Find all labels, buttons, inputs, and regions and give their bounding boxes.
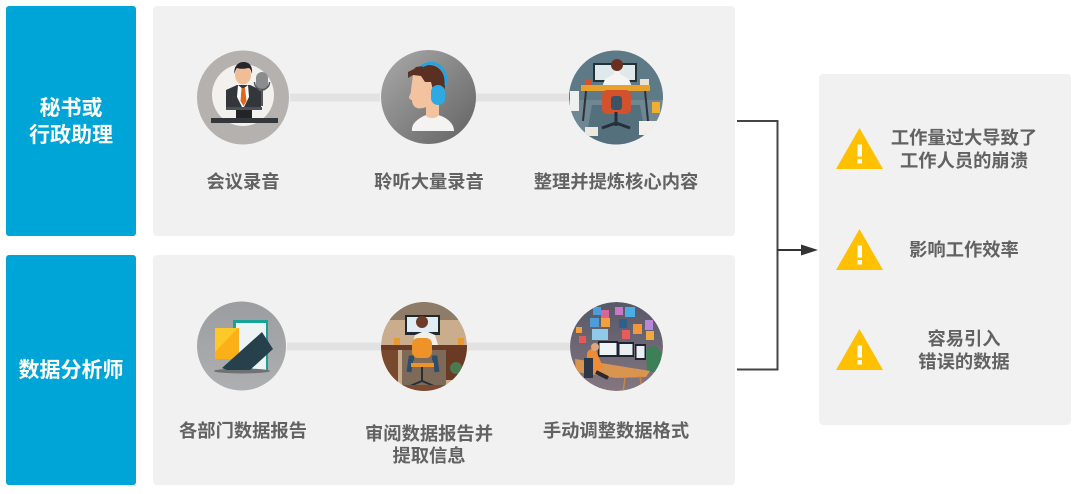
icon: department data reports	[197, 302, 286, 390]
icon: analyst reviewing reports	[380, 302, 468, 393]
icon: meeting recording speaker	[197, 50, 289, 144]
icon: analyst with multiple monitors and app tiles	[570, 302, 663, 392]
text: overload causes breakdown: 工作量过大导致了	[891, 127, 1037, 148]
panel: data analyst role label: 数据分析师	[18, 359, 124, 382]
arrow: bracket merging both workflows into consequences	[737, 121, 818, 370]
panel: secretary role label: 秘书或	[40, 96, 102, 120]
label: review reports and extract information: 提取信息	[392, 445, 466, 466]
icon: warning triangle 1	[836, 128, 883, 169]
text: introduces erroneous data: 错误的数据	[918, 351, 1010, 372]
panel: secretary role label: 行政助理	[29, 124, 113, 147]
text: introduces erroneous data: 容易引入	[927, 328, 1001, 349]
label: review reports and extract information: 审阅数据报告并	[365, 423, 493, 444]
label: listening to recordings: 聆听大量录音	[374, 171, 484, 192]
label: review reports and extract information	[365, 423, 493, 466]
label: meeting recording: 会议录音	[206, 171, 280, 192]
panel: secretary workflow	[153, 6, 735, 236]
panel: consequences	[819, 74, 1071, 425]
label: manually adjust data format: 手动调整数据格式	[543, 420, 689, 441]
panel: data analyst workflow	[153, 255, 735, 485]
text: introduces erroneous data	[918, 328, 1010, 372]
panel: data analyst role label	[6, 255, 136, 485]
panel: secretary role label	[6, 6, 136, 236]
label: department data reports: 各部门数据报告	[179, 420, 307, 441]
text: affects efficiency: 影响工作效率	[909, 239, 1019, 260]
label: organize and refine: 整理并提炼核心内容	[534, 171, 698, 192]
text: overload causes breakdown: 工作人员的崩溃	[900, 150, 1028, 171]
icon: warning triangle 2	[836, 229, 883, 270]
icon: man with headphones	[381, 50, 476, 144]
icon: warning triangle 3	[836, 329, 883, 370]
icon: person at desk from behind	[569, 50, 663, 145]
text: overload causes breakdown	[891, 127, 1037, 171]
